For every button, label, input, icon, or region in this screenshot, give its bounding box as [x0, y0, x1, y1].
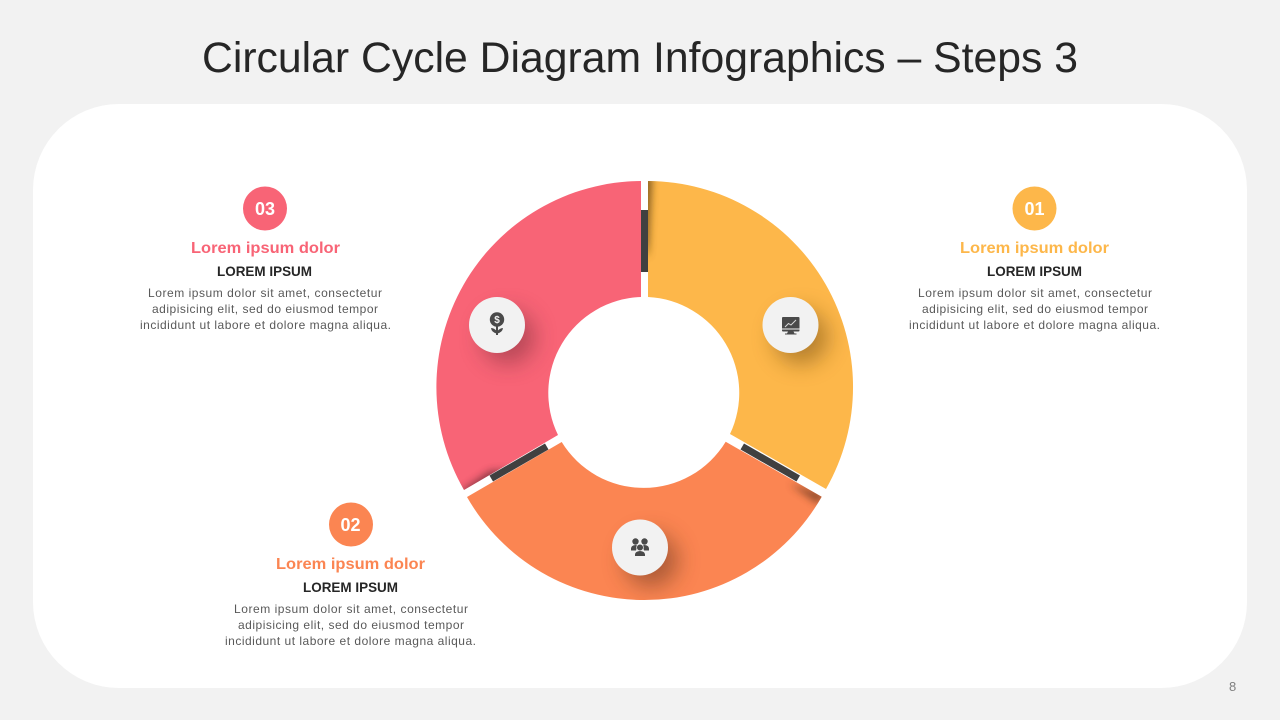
step 03 text block	[140, 186, 391, 332]
body 02: incididunt ut labore et dolore magna aliqua.	[225, 634, 476, 648]
step 02 text block	[225, 502, 476, 648]
body 01: Lorem ipsum dolor sit amet, consectetur	[918, 286, 1152, 300]
subheading 01: LOREM IPSUM	[987, 263, 1082, 279]
connector: top	[641, 210, 648, 272]
body 01	[909, 286, 1160, 332]
body 01: adipisicing elit, sed do eiusmod tempor	[922, 302, 1148, 316]
icon: dollar plant: $	[494, 315, 500, 326]
title: Circular Cycle Diagram Infographics – Steps 3	[202, 35, 1078, 82]
icon: dollar plant	[469, 297, 525, 353]
badge 01	[1012, 186, 1056, 230]
segment: 02 orange	[467, 442, 826, 600]
body 02: Lorem ipsum dolor sit amet, consectetur	[234, 602, 468, 616]
connector: lower left	[490, 444, 548, 482]
icon: monitor with chart	[762, 297, 818, 353]
subheading 03: LOREM IPSUM	[217, 263, 312, 279]
body 03: adipisicing elit, sed do eiusmod tempor	[152, 302, 378, 316]
segment: 03 pink	[436, 181, 641, 494]
heading 03: Lorem ipsum dolor	[191, 240, 340, 257]
connector: lower right	[740, 444, 800, 482]
badge 03: 03	[255, 199, 275, 219]
page number: 8	[1229, 679, 1236, 694]
badge 02	[329, 502, 373, 546]
heading 02: Lorem ipsum dolor	[276, 556, 425, 573]
badge 03	[243, 186, 287, 230]
step 01 text block	[909, 186, 1160, 332]
heading 01: Lorem ipsum dolor	[960, 240, 1109, 257]
badge 01: 01	[1024, 199, 1045, 219]
body 03: Lorem ipsum dolor sit amet, consectetur	[148, 286, 382, 300]
icon: people group	[612, 520, 668, 576]
body 03	[140, 286, 391, 332]
body 01: incididunt ut labore et dolore magna aliqua.	[909, 318, 1160, 332]
subheading 02: LOREM IPSUM	[303, 579, 398, 595]
panel: white rounded background	[33, 104, 1247, 688]
badge 02: 02	[340, 515, 361, 535]
body 02: adipisicing elit, sed do eiusmod tempor	[238, 618, 464, 632]
body 02	[225, 602, 476, 648]
body 03: incididunt ut labore et dolore magna aliqua.	[140, 318, 391, 332]
segment: 01 yellow	[642, 176, 853, 489]
cycle diagram	[436, 176, 853, 600]
